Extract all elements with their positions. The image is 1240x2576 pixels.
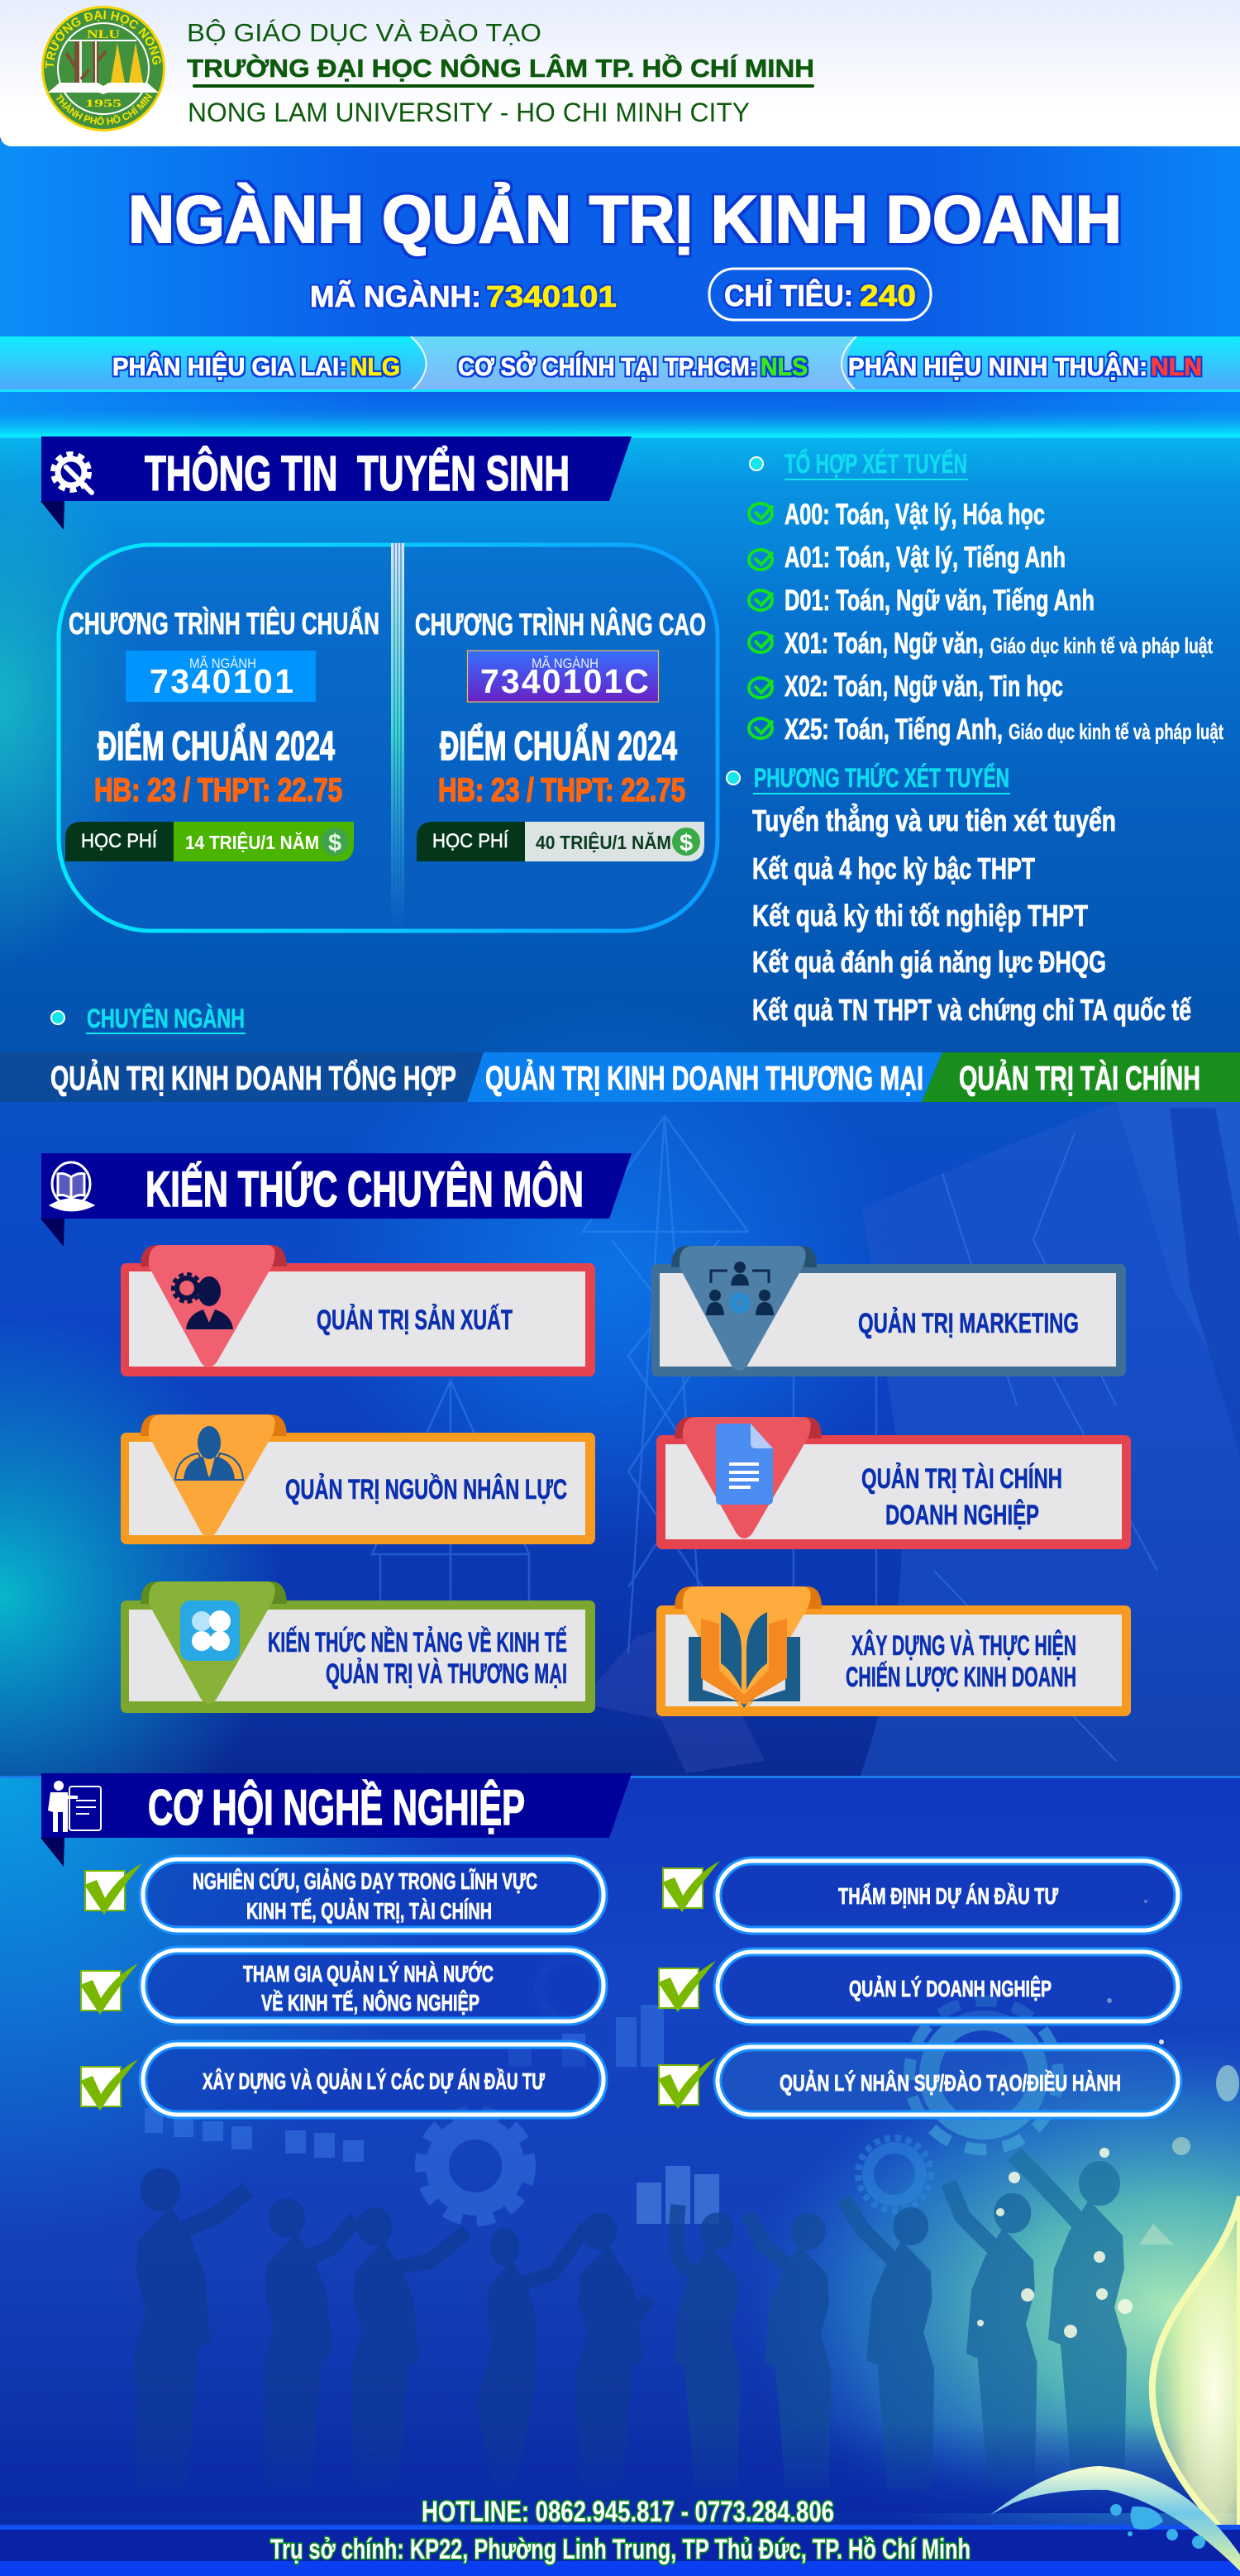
text: method 1: Tuyển thẳng và ưu tiên xét tuyển (752, 803, 1116, 837)
pill (718, 2047, 1178, 2115)
text: X01: X01: Toán, Ngữ văn, (785, 627, 984, 660)
text: label: QUẢN TRỊ NGUỒN NHÂN LỰC (285, 1474, 567, 1505)
icon: check (749, 718, 773, 738)
text: ministry name: BỘ GIÁO DỤC VÀ ĐÀO TẠO (187, 18, 541, 47)
career item 2 (80, 1950, 603, 2021)
icon: checkbox (658, 2058, 716, 2109)
tuition bar: HỌC PHÍ (81, 830, 157, 852)
background: tower (372, 1116, 876, 1703)
text: label: THAM GIA QUẢN LÝ NHÀ NƯỚC (243, 1960, 494, 1987)
heading: chuyên ngành: CHUYÊN NGÀNH (87, 1004, 245, 1033)
footer: address: Trụ sở chính: KP22, Phường Linh Trung, TP Thủ Đức, TP. Hồ Chí Minh (270, 2534, 971, 2565)
text: cutoff heading: ĐIỂM CHUẨN 2024 (440, 723, 677, 769)
text: Gia Lai campus: NLG (351, 352, 400, 381)
text: section title: CƠ HỘI NGHỀ NGHIỆP (148, 1780, 525, 1835)
text: label: QUẢN TRỊ VÀ THƯƠNG MẠI (326, 1658, 567, 1690)
panel: programs card (59, 543, 718, 931)
major code: 7340101 (486, 279, 617, 313)
text: label: NGHIÊN CỨU, GIẢNG DẠY TRONG LĨNH VỰC (193, 1868, 537, 1894)
panel: xây dựng chiến lược (656, 1586, 1131, 1716)
major code (310, 279, 617, 313)
code box (468, 651, 658, 702)
program: standard (65, 606, 379, 861)
background: suit (860, 1102, 1240, 1777)
text: label: THẨM ĐỊNH DỰ ÁN ĐẦU TƯ (838, 1883, 1059, 1909)
tuition bar (65, 822, 354, 861)
illustration: raised hands silhouettes (134, 2154, 1127, 2489)
pill (143, 1950, 603, 2021)
icon: people (175, 1426, 243, 1480)
text: X01 (785, 627, 1213, 660)
text: label (861, 1463, 1062, 1531)
icon: document (716, 1424, 773, 1505)
text: Gia Lai campus: PHÂN HIỆU GIA LAI: (112, 351, 347, 381)
icon: checkbox (80, 1963, 138, 2015)
heading: tổ hợp xét tuyển (750, 449, 968, 480)
footer bars (0, 2525, 1240, 2576)
icon: check (749, 632, 773, 652)
text: label: QUẢN TRỊ MARKETING (858, 1308, 1079, 1339)
text: specialization 2: QUẢN TRỊ KINH DOANH THƯƠNG MẠI (485, 1059, 923, 1097)
text: method 2: Kết quả 4 học kỳ bậc THPT (752, 852, 1035, 885)
text: label: QUẢN LÝ DOANH NGHIỆP (849, 1975, 1052, 2001)
panel: quản trị sản xuất (121, 1245, 595, 1376)
tuition bar: $ (328, 830, 341, 856)
tuition bar: 14 TRIỆU/1 NĂM (185, 831, 319, 853)
text: label: QUẢN TRỊ SẢN XUẤT (317, 1305, 513, 1336)
pill (143, 2044, 603, 2115)
text: label (268, 1627, 567, 1690)
heading: chuyên ngành (51, 1004, 246, 1034)
text: A01: A01: Toán, Vật lý, Tiếng Anh (785, 541, 1066, 574)
text: Ninh Thuan campus: NLN (1151, 352, 1202, 381)
program: standard: CHƯƠNG TRÌNH TIÊU CHUẨN (69, 606, 379, 641)
list: subject combinations (749, 499, 1223, 746)
text: A00: A00: Toán, Vật lý, Hóa học (785, 499, 1045, 531)
text: label: QUẢN TRỊ TÀI CHÍNH (861, 1463, 1062, 1495)
pill (718, 1861, 1178, 1930)
program: advanced: CHƯƠNG TRÌNH NÂNG CAO (415, 607, 706, 642)
header: university banner (0, 0, 1240, 146)
tuition bar: 40 TRIỆU/1 NĂM (536, 831, 671, 853)
text: label: KIẾN THỨC NỀN TẢNG VỀ KINH TẾ (268, 1627, 567, 1658)
fade at foot of silhouettes (0, 2422, 1240, 2513)
icon: checkbox (658, 1961, 716, 2012)
decoration: yellow flame (1152, 2197, 1240, 2550)
code box (126, 651, 316, 702)
decoration: bubbles (977, 1900, 1239, 2338)
campus band (0, 336, 1240, 392)
text: X25 (785, 713, 1223, 746)
program: advanced (415, 607, 706, 861)
icon: check (749, 678, 773, 698)
text: label: XÂY DỰNG VÀ THỰC HIỆN (851, 1630, 1076, 1662)
panel: kiến thức nền tảng (121, 1581, 595, 1713)
text: Ninh Thuan campus: PHÂN HIỆU NINH THUẬN: (848, 351, 1147, 381)
text: label (193, 1868, 537, 1924)
heading: tổ hợp xét tuyển: TỔ HỢP XÉT TUYỂN (785, 449, 967, 479)
quota pill: 240 (860, 279, 916, 312)
heading: Thông tin tuyển sinh (41, 436, 632, 530)
text: english university name: NONG LAM UNIVERSITY - HO CHI MINH CITY (188, 98, 750, 127)
icon: presenter (48, 1781, 101, 1832)
career item 6 (658, 2047, 1178, 2115)
icon: open book (689, 1612, 800, 1708)
career item 3 (80, 2044, 603, 2115)
code box: 7340101 (150, 662, 293, 700)
decoration: leaf (990, 2466, 1240, 2571)
code box: MÃ NGÀNH (189, 656, 256, 671)
icon: manager with gear (173, 1274, 233, 1329)
text: X02: X02: Toán, Ngữ văn, Tin học (785, 670, 1063, 703)
icon: team with gear (706, 1262, 774, 1315)
career item 4 (662, 1861, 1178, 1930)
panel: quản trị nguồn nhân lực (121, 1414, 595, 1544)
icon: checkbox (662, 1861, 720, 1912)
bar: specializations (0, 1052, 1240, 1102)
text: cutoff score: HB: 23 / THPT: 22.75 (438, 772, 685, 809)
career item 5 (658, 1952, 1178, 2021)
icon: puzzle brain (180, 1600, 240, 1661)
icon: checkbox (80, 2059, 138, 2111)
section background: title area (0, 141, 1240, 436)
background: gears and charts (145, 1957, 1058, 2224)
text: section title: THÔNG TIN TUYỂN SINH (145, 446, 570, 501)
text: method 3: Kết quả kỳ thi tốt nghiệp THPT (752, 899, 1088, 933)
panel: admission background (0, 435, 1240, 1054)
text: label: XÂY DỰNG VÀ QUẢN LÝ CÁC DỰ ÁN ĐẦU TƯ (203, 2068, 546, 2094)
quota pill: CHỈ TIÊU: (724, 278, 853, 312)
text: cutoff heading: ĐIỂM CHUẨN 2024 (98, 723, 335, 769)
icon: book emblem (51, 1162, 93, 1210)
panel: quản trị marketing (651, 1246, 1126, 1376)
major code: MÃ NGÀNH: (310, 279, 481, 313)
heading: Cơ hội nghề nghiệp (41, 1773, 632, 1867)
career item 1 (84, 1859, 603, 1930)
icon: gear and wrench (53, 454, 92, 493)
text: specialization 1: QUẢN TRỊ KINH DOANH TỔNG HỢP (50, 1058, 456, 1097)
title: NGÀNH QUẢN TRỊ KINH DOANH (128, 182, 1122, 257)
text: label (846, 1630, 1076, 1693)
code box: MÃ NGÀNH (532, 656, 599, 671)
text: label: CHIẾN LƯỢC KINH DOANH (846, 1662, 1076, 1693)
code box: 7340101C (480, 662, 649, 700)
divider (391, 543, 404, 926)
text: label: KINH TẾ, QUẢN TRỊ, TÀI CHÍNH (246, 1897, 492, 1924)
text: label: DOANH NGHIỆP (885, 1500, 1039, 1531)
icon: check (749, 590, 773, 610)
decoration: water drops (1110, 2504, 1205, 2549)
background: hand (579, 1620, 765, 1773)
tuition bar: $ (680, 830, 693, 856)
heading: Kiến thức chuyên môn (41, 1153, 632, 1247)
icon: university logo: 1955 (85, 97, 122, 109)
quota pill (709, 269, 931, 320)
text: section title: KIẾN THỨC CHUYÊN MÔN (145, 1162, 584, 1217)
pill (143, 1859, 603, 1930)
text: label (243, 1960, 494, 2015)
list: admission methods (752, 803, 1192, 1027)
text: cutoff score: HB: 23 / THPT: 22.75 (94, 772, 342, 809)
text: main campus: NLS (761, 352, 808, 381)
pill (718, 1952, 1178, 2021)
heading: phương thức xét tuyển: PHƯƠNG THỨC XÉT TUYỂN (754, 763, 1009, 793)
icon: check (749, 503, 773, 523)
text: label: VỀ KINH TẾ, NÔNG NGHIỆP (261, 1989, 479, 2015)
text: X25: X25: Toán, Tiếng Anh, (785, 713, 1003, 746)
icon: check (749, 550, 773, 570)
text: method 4: Kết quả đánh giá năng lực ĐHQG (752, 945, 1106, 979)
text: main campus: CƠ SỞ CHÍNH TẠI TP.HCM: (458, 351, 757, 381)
text: D01: D01: Toán, Ngữ văn, Tiếng Anh (785, 584, 1095, 617)
underline (193, 84, 814, 88)
heading: phương thức xét tuyển (727, 763, 1010, 794)
icon: checkbox (84, 1863, 142, 1915)
text: label: QUẢN LÝ NHÂN SỰ/ĐÀO TẠO/ĐIỀU HÀNH (780, 2069, 1121, 2096)
panel: quản trị tài chính (656, 1417, 1131, 1549)
panel: knowledge background (0, 1000, 1240, 1877)
icon: university logo (41, 6, 165, 131)
panel: career background (0, 1776, 1240, 2576)
text: university name: TRƯỜNG ĐẠI HỌC NÔNG LÂM TP. HỒ CHÍ MINH (187, 53, 814, 83)
tuition bar (417, 822, 704, 861)
icon: university logo: NLU (87, 28, 120, 41)
tuition bar: HỌC PHÍ (432, 830, 508, 852)
footer: hotline: HOTLINE: 0862.945.817 - 0773.284.806 (422, 2496, 834, 2528)
